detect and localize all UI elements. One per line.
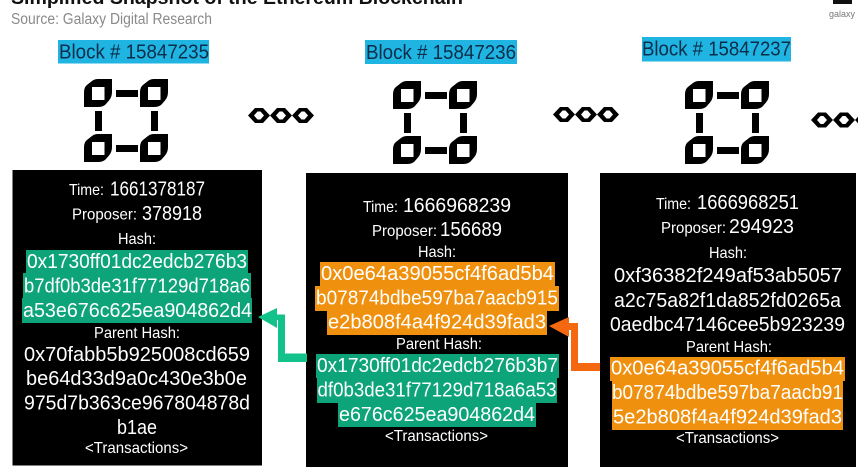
proposer [661,215,794,238]
hash label: Hash: [418,244,456,261]
parent hash label: Parent Hash: [396,336,482,353]
parent hash value [24,344,250,439]
hash value highlighted green: 0x1730ff01dc2edcb276b3 [27,251,247,273]
parent hash value highlighted green: 0x1730ff01dc2edcb276b3b7 [317,355,558,377]
parent hash value highlighted orange [610,357,845,430]
hash value highlighted orange [315,262,559,335]
transactions: <Transactions> [385,428,488,445]
parent hash value: b1ae [117,417,157,439]
icon: block network 1 [84,79,168,162]
proposer [72,202,202,225]
hash label: Hash: [709,245,747,262]
parent hash value highlighted green: e676c625ea904862d4 [339,404,535,426]
icon: chain link 2 [553,107,619,122]
parent hash value highlighted green [316,354,559,427]
parent hash label: Parent Hash: [94,325,180,342]
parent hash label: Parent Hash: [686,339,772,356]
panel: block 15847235 [12,170,262,466]
panel background [600,173,856,467]
arrow: green, block 2 parent hash to block 1 hash [258,308,307,362]
proposer: 156689 [440,218,502,241]
panel background [306,173,568,467]
time: Time: [363,199,398,216]
block label 15847235: Block # 15847235 [59,40,209,64]
hash value highlighted green: a53e676c625ea904862d4 [23,300,252,322]
transactions: <Transactions> [676,430,779,447]
icon: block network 2 [393,81,477,164]
hash label: Hash: [118,231,156,248]
parent hash value highlighted orange: b07874bdbe597ba7aacb91 [612,382,843,404]
transactions: <Transactions> [85,440,188,457]
hash value highlighted orange: b07874bdbe597ba7aacb915 [316,288,558,310]
galaxy logo: galaxy [829,9,855,20]
proposer: Proposer: [72,206,137,224]
hash value: 0xf36382f249af53ab5057 [614,265,842,287]
parent hash value highlighted orange: 0x0e64a39055cf4f6ad5b4 [611,358,844,380]
time [656,191,799,214]
proposer: Proposer: [661,220,726,237]
hash value highlighted green [22,250,252,323]
hash value highlighted orange: e2b808f4a4f924d39fad3 [328,312,546,334]
parent hash value: 0x70fabb5b925008cd659 [24,344,250,366]
time: Time: [69,182,104,199]
time: 1666968239 [403,194,511,217]
parent hash value: 975d7b363ce967804878d [24,392,250,414]
icon: chain link 1 [248,108,314,123]
proposer: 378918 [142,202,202,225]
galaxy logo [829,0,855,20]
block label 15847236: Block # 15847236 [366,41,516,64]
hash value highlighted green: b7df0b3de31f77129d718a6 [24,276,250,298]
time: 1661378187 [110,178,205,200]
parent hash value highlighted green: df0b3de31f77129d718a6a53 [318,380,556,402]
panel: block 15847236 [306,173,568,467]
icon: block network 3 [685,81,769,164]
proposer [372,218,502,241]
source line: Source: Galaxy Digital Research [11,11,212,28]
panel: block 15847237 [600,173,856,467]
time: Time: [656,196,691,213]
arrow: orange, block 3 parent hash to block 2 hash [549,317,600,371]
parent hash value highlighted orange: 5e2b808f4a4f924d39fad3 [613,406,842,428]
proposer: Proposer: [372,223,437,240]
hash value: 0aedbc47146cee5b923239 [610,314,845,336]
icon: chain link 3 [811,112,858,128]
time [69,178,205,200]
proposer: 294923 [729,215,794,238]
hash value [610,265,845,336]
hash value: a2c75a82f1da852fd0265a [614,290,842,312]
block label 15847237: Block # 15847237 [642,38,791,60]
parent hash value: be64d33d9a0c430e3b0e [26,368,247,390]
panel background [12,170,262,466]
hash value highlighted orange: 0x0e64a39055cf4f6ad5b4 [321,263,554,285]
time: 1666968251 [697,191,799,214]
